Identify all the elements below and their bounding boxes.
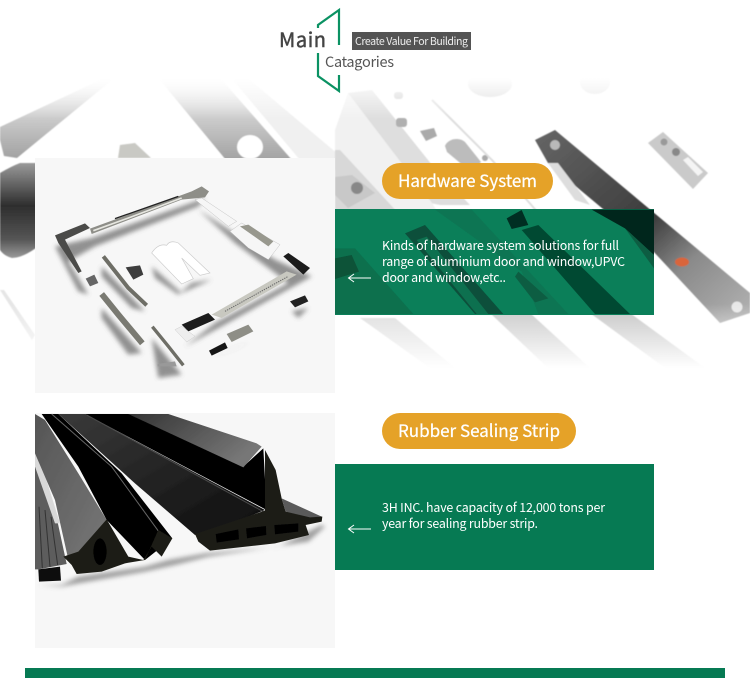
keyhole — [444, 138, 482, 163]
white handle — [152, 242, 210, 284]
title pill: hardware system — [382, 163, 553, 199]
arrow — [348, 274, 371, 282]
key plate — [172, 92, 291, 158]
keyhole left — [237, 135, 263, 159]
silver bracket — [648, 132, 708, 189]
plate edge — [432, 100, 540, 215]
shadows — [55, 198, 312, 378]
heading bracket mark — [318, 10, 339, 91]
orange indicator — [675, 258, 689, 266]
left metal bracket — [335, 175, 375, 208]
description panel: rubber — [335, 464, 654, 570]
round knobs — [470, 87, 510, 97]
tagline badge: Create Value For Building — [355, 34, 468, 49]
top arm — [90, 186, 209, 234]
end profile right — [195, 450, 322, 551]
black strip — [42, 414, 172, 560]
left corner — [55, 223, 90, 273]
black face — [85, 414, 267, 510]
black bar piece — [209, 342, 228, 356]
title pill: hardware system: Hardware System — [398, 167, 537, 192]
black lock body — [535, 130, 750, 323]
striker — [227, 325, 253, 342]
bolt lock — [102, 294, 142, 343]
left grey bar — [0, 92, 96, 158]
heading word: Main: Main — [279, 24, 326, 53]
top face — [128, 414, 262, 467]
product card: hardware — [35, 158, 335, 393]
rod lock — [103, 256, 147, 305]
lock plate: left band — [348, 90, 470, 205]
arrow — [348, 525, 371, 533]
footer bar — [25, 668, 725, 678]
heading — [279, 10, 471, 91]
description text: range of aluminium door and window,UPVC — [382, 252, 625, 270]
shoot bolt — [152, 327, 183, 365]
lip — [282, 498, 322, 517]
title pill: rubber sealing strip: Rubber Sealing Strip — [398, 417, 560, 442]
lower strips — [492, 315, 578, 358]
screw — [550, 140, 560, 150]
description text: year for sealing rubber strip. — [382, 514, 538, 532]
background: hardware photo — [0, 70, 750, 368]
panel: rubber sealing strip — [35, 413, 654, 648]
description text: 3H INC. have capacity of 12,000 tons per — [382, 498, 605, 516]
description panel: hardware — [335, 209, 654, 315]
product card: rubber — [35, 413, 335, 648]
description text: door and window,etc.. — [382, 268, 506, 286]
ribbed strip — [35, 457, 67, 569]
small silver clip — [118, 143, 151, 158]
clip — [126, 265, 143, 280]
title pill: rubber sealing strip — [382, 413, 576, 449]
faint left strip — [0, 290, 35, 340]
screw — [732, 302, 742, 312]
shadow — [38, 525, 325, 587]
black block — [290, 295, 308, 307]
middle strip — [58, 414, 265, 535]
black rubber at left edge — [0, 163, 36, 258]
panel: hardware system — [35, 158, 654, 393]
profile holes — [216, 529, 239, 543]
panel see-through hardware shapes — [335, 210, 654, 314]
black link — [283, 253, 310, 275]
white right arm — [195, 198, 237, 226]
lower arm — [212, 271, 297, 318]
end profile left — [63, 519, 172, 574]
grey strip — [35, 414, 107, 557]
description text: Kinds of hardware system solutions for full — [382, 236, 619, 254]
heading word: Catagories: Catagories — [325, 51, 394, 72]
small keeper — [86, 275, 98, 286]
white strip — [251, 100, 335, 158]
